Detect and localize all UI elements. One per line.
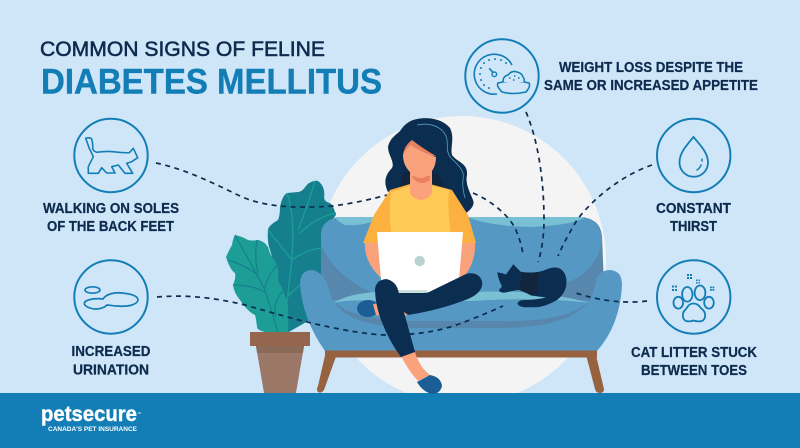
front leaf (226, 235, 288, 332)
label: weight loss (544, 60, 758, 94)
connector: walking (156, 163, 387, 207)
title: COMMON SIGNS OF FELINE (40, 38, 325, 61)
connector: thirst (558, 165, 652, 256)
label: increased urination: INCREASED (72, 344, 150, 360)
connector: to cat from hair (473, 193, 523, 255)
logo: petsecure (41, 402, 137, 426)
shirt body (390, 186, 452, 240)
wooden rail (325, 350, 597, 358)
laptop (377, 232, 463, 292)
slipper (417, 375, 442, 394)
sofa legs (317, 351, 338, 393)
label: cat litter (631, 345, 757, 379)
face (403, 145, 436, 178)
back cushion right (460, 217, 602, 294)
label: constant thirst (656, 201, 731, 235)
back cushion left (321, 217, 470, 293)
back leaf (268, 181, 345, 333)
connector: weight loss (526, 112, 544, 262)
shirt sleeves (363, 184, 476, 247)
footer band (0, 393, 800, 448)
icon: paw (657, 260, 730, 334)
shadow behind neck (399, 172, 447, 190)
seat base (325, 300, 597, 351)
logo: CANADA'S PET INSURANCE (48, 426, 137, 433)
illustration: plant (226, 181, 345, 393)
seat cushion highlight (333, 291, 590, 303)
label: weight loss: WEIGHT LOSS DESPITE THE (559, 60, 743, 76)
lower leg skin (401, 352, 430, 381)
sofa back (321, 217, 605, 310)
label: increased urination: URINATION (73, 362, 149, 378)
seat cushion (333, 300, 590, 321)
label: increased urination (72, 344, 150, 378)
label: constant thirst: CONSTANT (656, 201, 731, 217)
left arm (300, 270, 385, 351)
right arm (560, 270, 622, 351)
connector: litter (573, 292, 647, 302)
front leg (375, 279, 415, 357)
face shade (403, 140, 436, 156)
foot under thigh (402, 300, 411, 316)
title (40, 38, 382, 102)
logo: ™ (137, 411, 141, 416)
illustration: sofa (300, 217, 622, 393)
back thigh (395, 273, 482, 315)
icon: puddles (74, 260, 148, 334)
illustration: woman (357, 118, 482, 394)
pot (256, 346, 304, 393)
label: weight loss: SAME OR INCREASED APPETITE (544, 78, 758, 94)
hair (385, 118, 474, 214)
icon: water drop (657, 119, 730, 192)
label: walking on soles: OF THE BACK FEET (47, 219, 174, 235)
icon: scale and food bowl (465, 39, 539, 113)
label: cat litter: BETWEEN TOES (641, 363, 747, 379)
blue slipper behind (357, 300, 379, 317)
connector: urination (157, 296, 503, 335)
forearms (365, 243, 384, 280)
icon: walking cat (74, 119, 148, 192)
label: walking on soles: WALKING ON SOLES (43, 201, 179, 217)
background circle (318, 116, 606, 404)
label: walking on soles (43, 201, 179, 235)
title: DIABETES MELLITUS (41, 62, 382, 102)
label: cat litter: CAT LITTER STUCK (631, 345, 757, 361)
neck (410, 170, 432, 200)
seat shadow band (333, 300, 590, 328)
back cushion highlights (335, 217, 380, 225)
label: constant thirst: THIRST (670, 219, 717, 235)
illustration: cat (497, 264, 567, 307)
